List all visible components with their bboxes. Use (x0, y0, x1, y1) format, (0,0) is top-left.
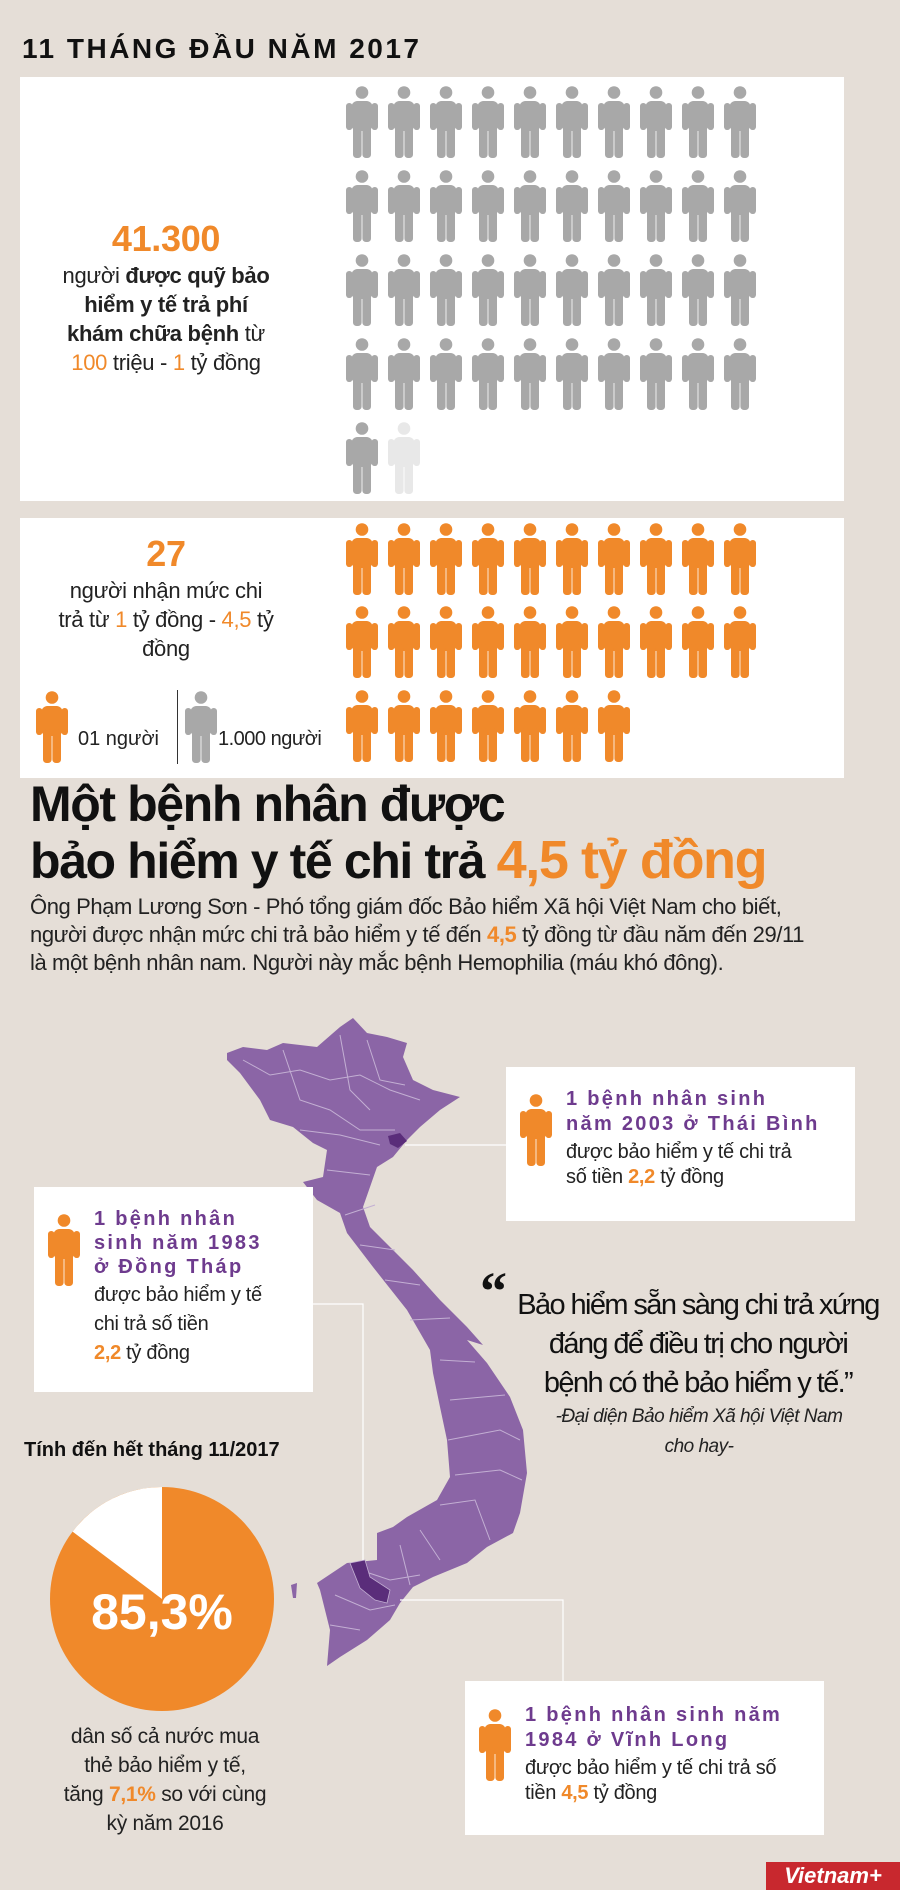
callout: Đồng Tháp: được bảo hiểm y tế (94, 1284, 262, 1306)
callout: Vĩnh Long: 1 bệnh nhân sinh năm (525, 1704, 782, 1726)
callout: Thái Bình (506, 1067, 855, 1221)
stat text: 27 (58, 533, 274, 661)
callout: Đồng Tháp: 1 bệnh nhân (94, 1208, 237, 1230)
callout: Thái Bình: số tiền 2,2 tỷ đồng (566, 1166, 724, 1188)
callout: Thái Bình: 1 bệnh nhân sinh (566, 1088, 767, 1110)
text block: intro paragraph: Ông Phạm Lương Sơn - Phó tổng giám đốc Bảo hiểm Xã hội Việt Nam cho biết, (30, 894, 781, 919)
callout: Vĩnh Long (465, 1681, 824, 1835)
callout: Đồng Tháp: 2,2 tỷ đồng (94, 1342, 190, 1364)
stat text: 27: đồng (142, 636, 190, 661)
callout: Thái Bình: được bảo hiểm y tế chi trả (566, 1141, 791, 1163)
heading (30, 776, 766, 890)
quote: “ (480, 1261, 507, 1321)
callout: Đồng Tháp: chi trả số tiền (94, 1313, 208, 1335)
stat text: 41.300: hiểm y tế trả phí (84, 292, 248, 317)
quote: đáng để điều trị cho người (549, 1328, 847, 1360)
title: 11 THÁNG ĐẦU NĂM 2017 (22, 33, 421, 64)
pie chart: 85,3%: 85,3% (91, 1584, 233, 1640)
text block: pie caption: dân số cả nước mua (71, 1725, 259, 1748)
quote: -Đại diện Bảo hiểm Xã hội Việt Nam (556, 1406, 842, 1427)
pie chart: 85,3% (50, 1487, 274, 1711)
logo (766, 1862, 900, 1890)
quote: bệnh có thẻ bảo hiểm y tế.” (544, 1367, 852, 1399)
quote (480, 1261, 879, 1457)
panel: 41.300 people (20, 77, 844, 501)
callout: Đồng Tháp: ở Đồng Tháp (94, 1256, 244, 1278)
stat text: 41.300: khám chữa bệnh từ (67, 321, 265, 346)
stat text: 41.300: 41.300 (112, 218, 220, 259)
text block: pie caption: thẻ bảo hiểm y tế, (84, 1754, 246, 1777)
quote: Bảo hiểm sẵn sàng chi trả xứng (517, 1289, 879, 1321)
stat text: 27: trả từ 1 tỷ đồng - 4,5 tỷ (58, 607, 274, 632)
icon: person (520, 1094, 552, 1166)
logo: Vietnam+ (784, 1863, 882, 1888)
text block: intro paragraph: người được nhận mức chi trả bảo hiểm y tế đến 4,5 tỷ đồng từ đầu năm đến 29/11 (30, 922, 804, 947)
text block: pie caption: kỳ năm 2016 (107, 1812, 223, 1835)
callout: Đồng Tháp (34, 1187, 313, 1392)
chart: orange pictogram (346, 523, 756, 762)
legend (36, 690, 321, 764)
stat text: 41.300: 100 triệu - 1 tỷ đồng (71, 350, 261, 375)
chart: gray pictogram (346, 86, 756, 494)
callout: Vĩnh Long: 1984 ở Vĩnh Long (525, 1729, 729, 1751)
text block: intro paragraph: là một bệnh nhân nam. Người này mắc bệnh Hemophilia (máu khó đông). (30, 950, 723, 975)
legend: 1.000 người (218, 728, 321, 750)
icon: person (48, 1214, 80, 1286)
callout: Thái Bình: năm 2003 ở Thái Bình (566, 1113, 820, 1135)
quote: cho hay- (665, 1436, 733, 1457)
subheading: by Nov 2017: Tính đến hết tháng 11/2017 (24, 1439, 280, 1461)
icon: person (479, 1709, 511, 1781)
icon: gray person (185, 691, 217, 763)
text block: pie caption (64, 1725, 266, 1835)
text block: intro paragraph (30, 894, 804, 975)
callout: Vĩnh Long: được bảo hiểm y tế chi trả số (525, 1757, 776, 1779)
legend: 01 người (78, 728, 159, 750)
icon: orange person (36, 691, 68, 763)
stat text: 27: 27 (146, 533, 186, 574)
stat text: 41.300: người được quỹ bảo (63, 263, 269, 288)
heading: Một bệnh nhân được (30, 776, 504, 832)
stat text: 27: người nhận mức chi (70, 578, 262, 603)
callout: Vĩnh Long: tiền 4,5 tỷ đồng (525, 1782, 657, 1804)
callout: Đồng Tháp: sinh năm 1983 (94, 1232, 262, 1254)
stat text: 41.300 (63, 218, 269, 375)
panel: 27 people (20, 518, 844, 778)
text block: pie caption: tăng 7,1% so với cùng (64, 1783, 266, 1806)
heading: bảo hiểm y tế chi trả 4,5 tỷ đồng (30, 830, 766, 890)
